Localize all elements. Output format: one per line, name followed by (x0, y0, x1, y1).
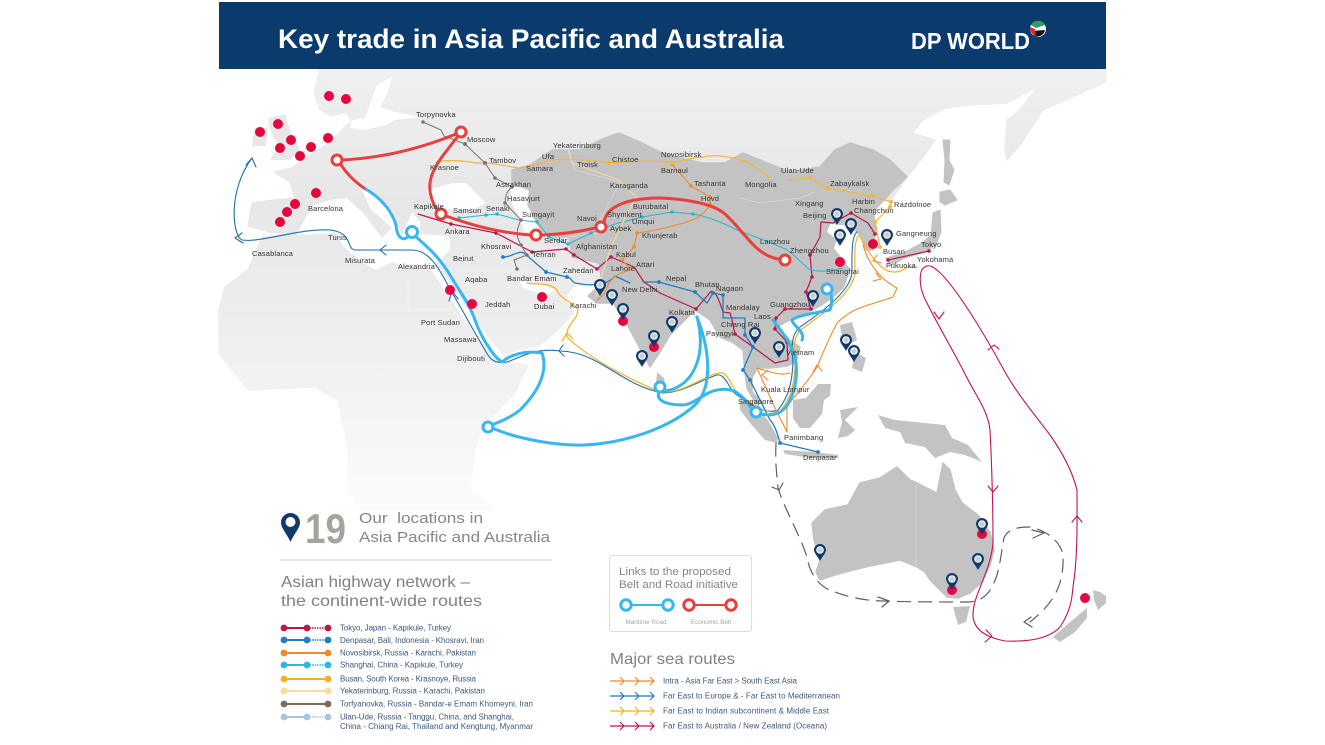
city labels: Mandalay (726, 303, 760, 312)
route: Shanghai to Kapikule (457, 210, 843, 271)
route: Yekaterinburg to Karachi (569, 150, 636, 297)
city labels: Razdolnoe (894, 200, 931, 209)
legend: Europe: Far East to Europe & - Far East to Mediterranean (663, 692, 840, 700)
city labels: Denpasar (803, 453, 837, 462)
city labels: Torpynovka (416, 110, 457, 119)
sea: Black Sea (427, 183, 486, 210)
icon: big location pin (281, 513, 300, 542)
city labels: Panimbang (784, 433, 823, 442)
country borders (408, 150, 916, 570)
economic belt key: Economic Belt (691, 619, 731, 626)
city labels: Laos (754, 312, 771, 321)
city labels: Krasnoe (430, 163, 459, 172)
city labels: Barnaul (661, 166, 688, 175)
city labels: Chistoe (612, 155, 638, 164)
sea: Caspian (510, 185, 540, 232)
heading: Asian highway network: Asian highway network – (281, 574, 470, 591)
city labels: Hovd (701, 194, 719, 203)
route: Torfyanovka to Bandar-e Emam (421, 120, 529, 271)
legend: Busan: Busan, South Korea - Krasnoye, Russia (340, 674, 477, 684)
seas cut from land (297, 77, 555, 362)
legend: Ulan-Ude: Ulan-Ude, Russia - Tanggu, China, and Shanghai, (340, 712, 514, 722)
legend: Yekaterinburg: Yekaterinburg, Russia - Karachi, Pakistan (340, 686, 485, 696)
city labels: Serdar (544, 236, 568, 245)
city labels: Nepal (666, 274, 687, 283)
city labels: Gangneung (896, 229, 937, 238)
route: Tokyo to Kapikule (418, 211, 931, 363)
panel: Belt and Road initiative (610, 556, 752, 632)
city labels: Tunis (328, 233, 347, 242)
legend: Denpasar: Denpasar, Bali, Indonesia - Khosravi, Iran (340, 636, 484, 645)
heading: Asian highway network: the continent-wide routes (281, 593, 482, 610)
city labels: Astrakhan (496, 180, 531, 189)
city labels: Ufa (542, 152, 555, 161)
city labels: Aqaba (465, 275, 488, 284)
city labels: Karaganda (610, 181, 649, 190)
legend: Shanghai: Shanghai, China - Kapıkule, Turkey (340, 660, 463, 670)
city labels: Massawa (444, 335, 477, 344)
city labels: Kabul (616, 250, 636, 259)
legend: intra Asia: Intra - Asia Far East > South East Asia (663, 676, 798, 686)
city labels: Samara (526, 164, 554, 173)
city labels: Barcelona (308, 204, 344, 213)
city labels: Casablanca (252, 249, 294, 258)
city labels: Navoi (577, 214, 597, 223)
sea: Baltic (350, 77, 419, 130)
city labels: Jeddah (485, 300, 511, 309)
city labels: Tokyo (921, 240, 941, 249)
city labels: Bhutan (695, 280, 720, 289)
city labels: Samsun (453, 206, 481, 215)
count: 19 (305, 505, 346, 552)
city labels: Sumgayit (522, 210, 555, 219)
legend: Novosibirsk: Novosibirsk, Russia - Karachi, Pakistan (340, 648, 476, 658)
city labels: Umqui (632, 217, 655, 226)
land: Tasmania and New Zealand (953, 590, 1106, 642)
city labels: Chiang Rai (721, 320, 760, 329)
city labels: Hasavjurt (507, 194, 541, 203)
DP World regional dots (255, 91, 1090, 603)
map background (219, 69, 1106, 745)
city labels: Beirut (453, 254, 474, 263)
DP World logo: DP WORLD (911, 28, 1030, 54)
city labels: Vietnam (786, 348, 814, 357)
city labels: Afghanistan (576, 242, 617, 251)
sea route: Far East to Indian subcontinent (527, 235, 917, 412)
city labels: Port Sudan (421, 318, 460, 327)
sea: Persian Gulf (519, 280, 555, 294)
belt and road hubs (332, 127, 832, 432)
highway legend (281, 624, 533, 731)
city labels: Tambov (489, 156, 516, 165)
city labels: Khunjerab (642, 231, 678, 240)
route: economic belt (340, 134, 778, 259)
city labels: Nagaon (716, 284, 743, 293)
sea: Mediterranean (297, 190, 450, 270)
city labels: Beijing (803, 211, 827, 220)
sea route: intra Asia (757, 245, 897, 432)
city labels: Troisk (577, 160, 598, 169)
locations caption (359, 510, 551, 546)
city labels: Aybek (610, 224, 632, 233)
city labels: Lahore (611, 264, 635, 273)
city labels: Alexandria (398, 262, 436, 271)
sea route: dashed Australia loop (772, 443, 1063, 627)
legend: Busan (281, 674, 477, 684)
city labels: Shanghai (826, 267, 859, 276)
economic belt key (684, 600, 736, 626)
city labels: Kolkata (669, 308, 696, 317)
sea route: Far East to Europe and Mediterranean (234, 158, 857, 411)
land: British Isles (252, 114, 300, 160)
legend: Novosibirsk (281, 648, 476, 658)
city labels: Moscow (467, 135, 496, 144)
city labels: Zahedan (563, 266, 594, 275)
city labels: Ankara (445, 227, 470, 236)
panel: Belt and Road initiative: Links to the proposed (619, 566, 731, 578)
city labels: Kapikule (414, 202, 444, 211)
legend: Shanghai (281, 660, 463, 670)
panel: Belt and Road initiative: Belt and Road initiative (619, 579, 738, 591)
route: maritime road (364, 188, 832, 445)
heading: Asian highway network (281, 574, 482, 610)
city labels: Changchun (854, 206, 894, 215)
city labels: Tashanta (694, 179, 726, 188)
arrow heads (235, 158, 564, 356)
city labels: Khosravi (481, 242, 512, 251)
city labels: Yokohama (917, 255, 954, 264)
city labels: Dijibouti (457, 354, 485, 363)
city labels: Bandar Emam (507, 274, 557, 283)
route: Busan to Krasnoye (436, 156, 893, 249)
city labels: Burubaital (633, 202, 668, 211)
maritime road key (621, 600, 673, 626)
city labels: Kuala Lumpur (761, 385, 810, 394)
city labels: Payagyi (706, 329, 734, 338)
city labels: Senaki (486, 204, 510, 213)
city labels: Tehran (532, 250, 556, 259)
heading: Major sea routes: Major sea routes (610, 651, 735, 668)
city labels: Busan (883, 247, 905, 256)
city labels: Novosibirsk (661, 150, 702, 159)
city labels: Misurata (345, 256, 376, 265)
city labels: Guangzhou (770, 300, 810, 309)
legend: Tokyo: Tokyo, Japan - Kapıkule, Turkey (340, 624, 451, 632)
city labels: Xingang (795, 199, 824, 208)
route: Denpasar to Khosravi (501, 252, 820, 454)
locations count block (281, 505, 551, 552)
land: Central Asia and China (512, 133, 907, 404)
city labels: Fukuoka (886, 261, 916, 270)
land: Indonesia, Philippines and New Guinea (740, 322, 982, 462)
city labels (252, 110, 954, 462)
location pins (594, 208, 988, 590)
route: Novosibirsk to Karachi (597, 162, 712, 300)
legend: Ulan-Ude: China - Chiang Rai, Thailand and Kengtung, Myanmar (340, 722, 533, 731)
legend: Oceania: Far East to Australia / New Zealand (Oceana) (663, 722, 827, 730)
city labels: Dubai (534, 302, 555, 311)
land: Sri Lanka (656, 372, 666, 392)
land: Australia (812, 463, 994, 598)
city labels: Mongolia (745, 180, 777, 189)
header banner (219, 2, 1106, 69)
legend: Tokyo (281, 624, 451, 632)
sea routes legend (610, 676, 840, 730)
maritime road key: Maritime Road (626, 619, 667, 626)
land: Eurasia and Africa (219, 69, 1106, 510)
locations caption: Our locations in (359, 510, 483, 527)
city labels: Ulan-Ude (781, 166, 814, 175)
city labels: Attari (636, 260, 655, 269)
city labels: Lanzhou (760, 237, 790, 246)
city labels: Shymkent (607, 210, 642, 219)
sea route: Oceania (920, 266, 1082, 642)
city labels: New Delhi (622, 285, 658, 294)
city labels: Zabaykalsk (830, 179, 870, 188)
city labels: Yekaterinburg (553, 141, 601, 150)
land: Japan (886, 140, 957, 266)
legend: Indian subcontinent: Far East to Indian subcontinent & Middle East (663, 706, 830, 716)
city labels: Karachi (570, 301, 597, 310)
city labels: Zhengzhou (790, 246, 829, 255)
legend: Torfyanovka: Torfyanovka, Russia - Bandar-e Emam Khomeyni, Iran (340, 700, 533, 708)
title: Key trade in Asia Pacific and Australia (278, 24, 785, 54)
city labels: Harbin (852, 197, 875, 206)
city labels: Singapore (738, 397, 774, 406)
legend: Ulan-Ude (281, 712, 533, 731)
sea: Red Sea (430, 268, 505, 362)
locations caption: Asia Pacific and Australia (359, 529, 551, 546)
